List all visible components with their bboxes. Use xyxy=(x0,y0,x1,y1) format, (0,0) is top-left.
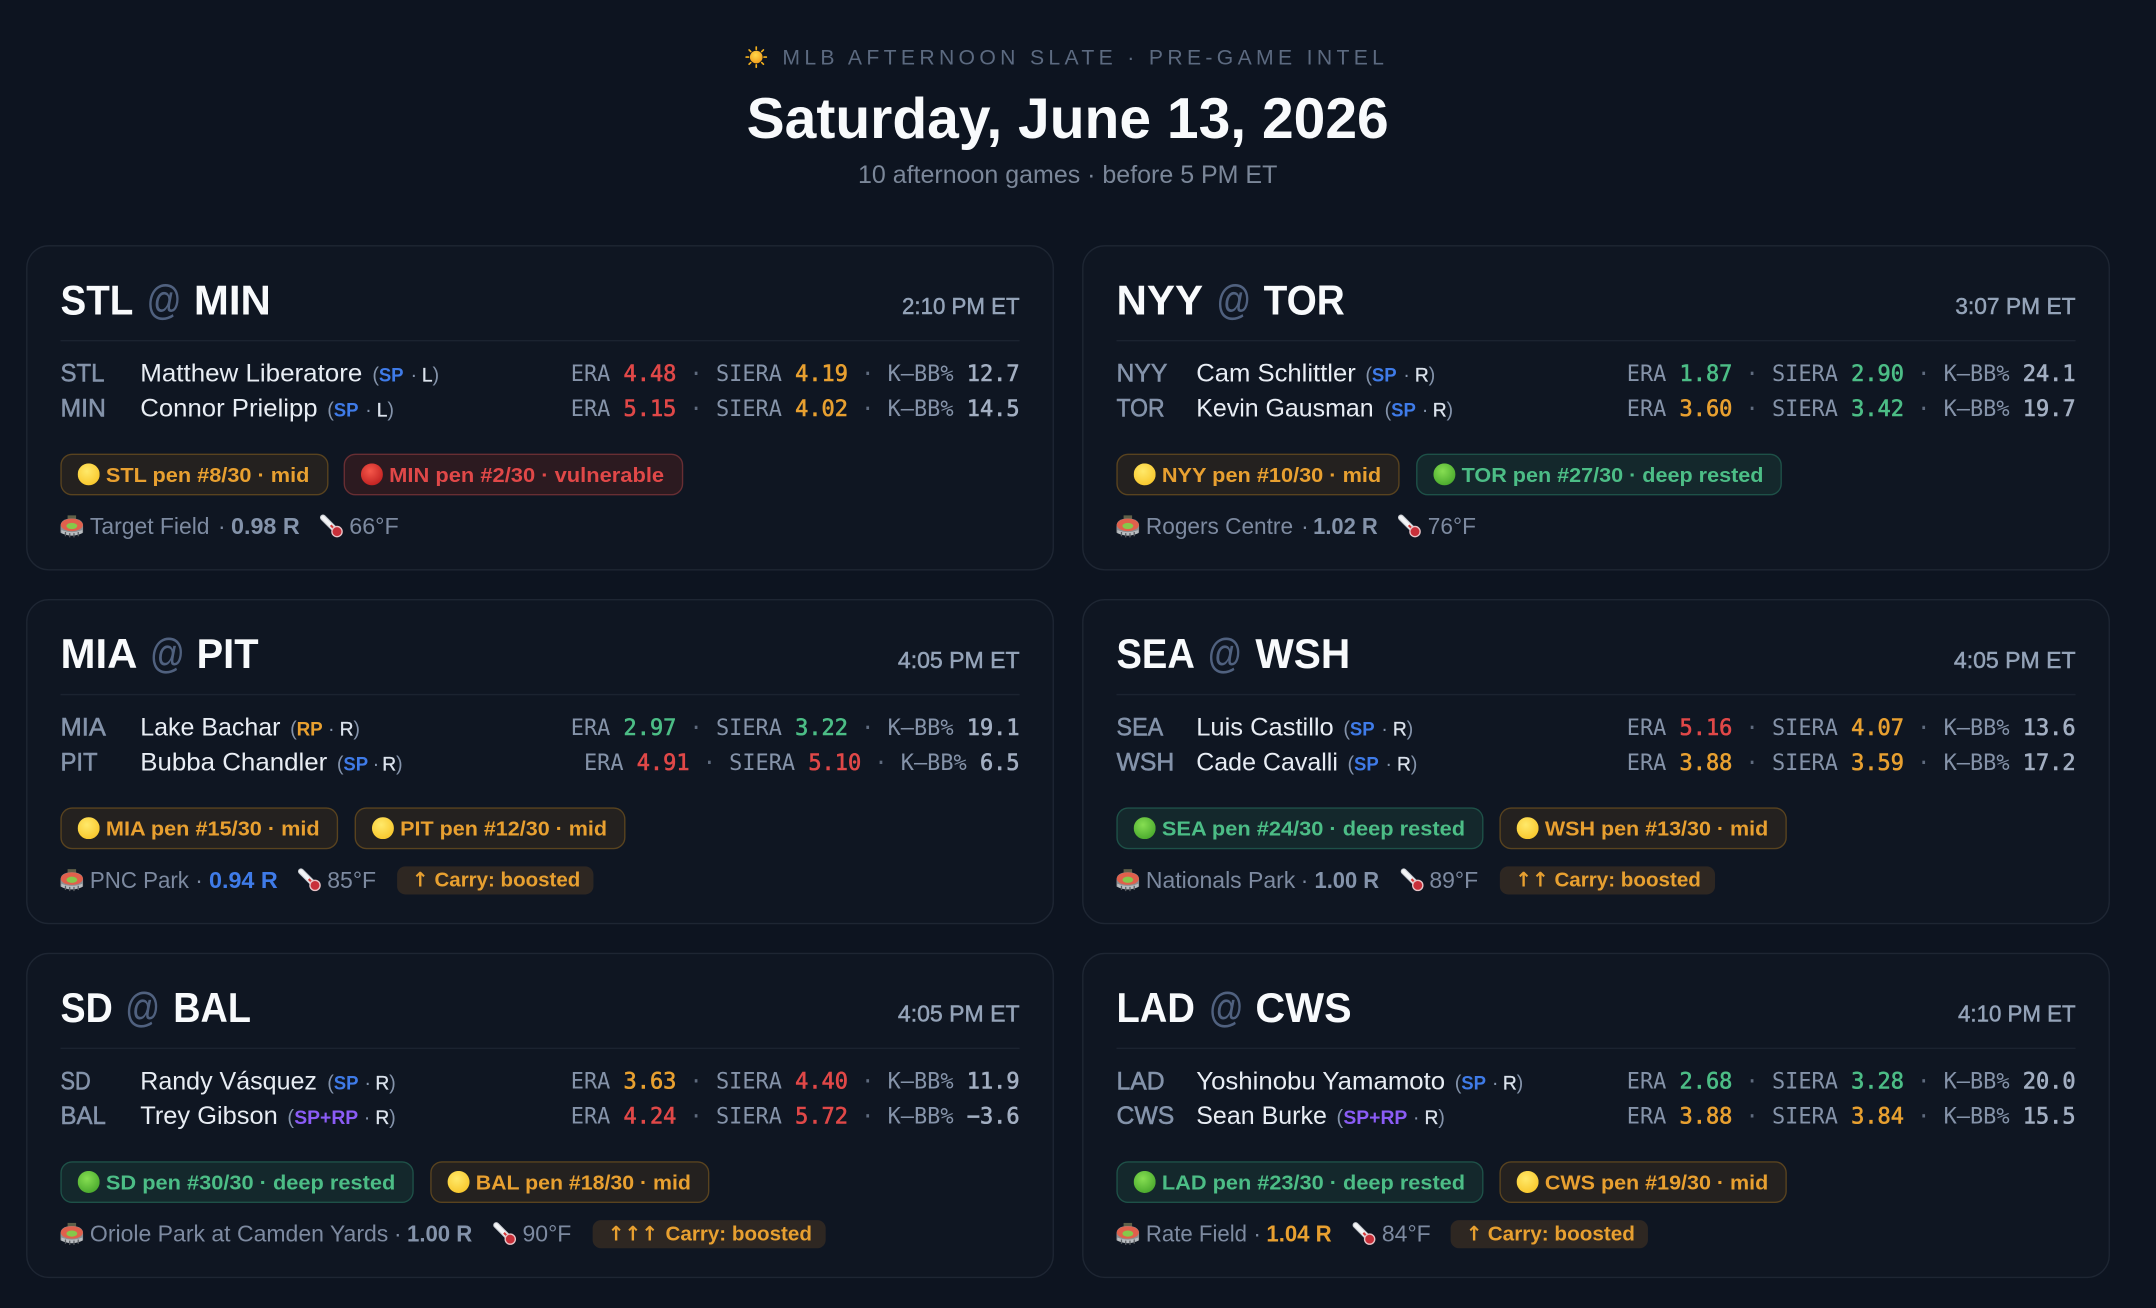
pitcher row: TOR: SP xyxy=(1391,400,1416,422)
bullpen pill: MIN xyxy=(344,454,683,495)
pitcher row: LAD: R xyxy=(1503,1073,1517,1094)
pitcher row: STL: SP xyxy=(379,365,404,387)
pitcher row: SD: SP xyxy=(334,1072,358,1094)
bullpen pill: BAL xyxy=(431,1162,709,1202)
venue line: 0.94 R xyxy=(209,867,278,893)
matchup heading: LAD xyxy=(1116,985,1195,1031)
pitcher row: BAL: · xyxy=(364,1107,370,1129)
game time: 4:05 PM ET xyxy=(898,647,1020,673)
venue line: · xyxy=(1301,513,1309,539)
pitcher row: STL: STL xyxy=(60,361,104,388)
pitcher row: TOR: ) xyxy=(1446,400,1453,422)
pitcher row: TOR: R xyxy=(1433,401,1447,422)
pitcher row: SEA: ) xyxy=(1407,718,1413,740)
pitcher row: STL: ) xyxy=(432,365,439,387)
pitcher row: MIA: R xyxy=(340,719,354,740)
matchup heading: @ xyxy=(150,631,185,677)
pitcher row: PIT: R xyxy=(382,754,396,775)
stats: LAD: ERA 2.68 · SIERA 3.28 · K–BB% 20.0 xyxy=(1627,1070,2076,1095)
pitcher row: MIA: Lake Bachar xyxy=(140,714,280,741)
pitcher row: NYY: ) xyxy=(1429,365,1435,387)
pitcher row: SEA: ( xyxy=(1343,718,1350,740)
panel: NYY at TOR xyxy=(1083,246,2109,570)
pitcher row: PIT: SP xyxy=(343,753,368,775)
bullpen pill: TOR xyxy=(1417,454,1781,495)
pitcher row: LAD: ( xyxy=(1455,1072,1462,1094)
pitcher row: MIN xyxy=(60,396,394,423)
stats: PIT: ERA 4.91 · SIERA 5.10 · K–BB% 6.5 xyxy=(584,751,1020,776)
pitcher row: LAD: ) xyxy=(1517,1072,1523,1094)
pitcher row: BAL xyxy=(60,1103,396,1130)
pitcher row: WSH: SP xyxy=(1354,753,1379,775)
pitcher row: CWS: Sean Burke xyxy=(1196,1103,1327,1130)
bullpen pill: PIT xyxy=(355,808,625,849)
stats: SD: ERA 3.63 · SIERA 4.40 · K–BB% 11.9 xyxy=(571,1070,1020,1095)
matchup heading: @ xyxy=(125,985,160,1031)
pitcher row: LAD: LAD xyxy=(1116,1068,1165,1095)
bullpen pill: MIN: MIN pen #2/30 · vulnerable xyxy=(389,464,664,487)
panel: SD at BAL xyxy=(27,953,1053,1277)
pitcher row: TOR xyxy=(1116,396,1453,423)
bullpen pill: MIA xyxy=(61,808,337,849)
pitcher row: SD: ) xyxy=(389,1072,396,1094)
matchup heading: SD xyxy=(60,985,113,1031)
game time: 4:05 PM ET xyxy=(1954,647,2076,673)
icon: sun xyxy=(746,47,766,67)
venue line: Target Field xyxy=(90,513,210,539)
pitcher row: LAD: · xyxy=(1492,1072,1499,1094)
venue line: Rate Field xyxy=(1146,1221,1247,1247)
venue line xyxy=(60,1220,826,1248)
pitcher row: CWS: CWS xyxy=(1116,1103,1174,1130)
matchup heading: MIN xyxy=(194,277,271,323)
venue line: 85°F xyxy=(327,867,376,893)
venue line: 0.98 R xyxy=(231,513,300,539)
carry badge: Carry: boosted xyxy=(1554,869,1701,892)
bullpen pill: WSH xyxy=(1500,808,1786,849)
matchup heading: NYY xyxy=(1116,277,1203,323)
panel: SEA at WSH xyxy=(1083,600,2109,924)
kicker line: MLB AFTERNOON SLATE · PRE-GAME INTEL xyxy=(782,47,1384,70)
pitcher row: WSH: · xyxy=(1385,753,1392,775)
stats: BAL: ERA 4.24 · SIERA 5.72 · K–BB% −3.6 xyxy=(571,1105,1020,1130)
matchup heading xyxy=(1116,985,1352,1031)
venue line: · xyxy=(1301,867,1308,893)
matchup heading: @ xyxy=(1207,631,1242,677)
pitcher row: SEA xyxy=(1116,714,1413,741)
matchup heading xyxy=(1116,631,1350,677)
bullpen pill: WSH: WSH pen #13/30 · mid xyxy=(1545,818,1768,841)
pitcher row: SD: R xyxy=(375,1073,389,1094)
pitcher row: BAL: R xyxy=(375,1108,389,1129)
bullpen pill: CWS xyxy=(1500,1162,1786,1202)
game time: 2:10 PM ET xyxy=(902,293,1020,319)
pitcher row: WSH: WSH xyxy=(1116,749,1174,776)
matchup heading: PIT xyxy=(197,631,258,677)
carry badge: ↑ xyxy=(1466,1222,1483,1246)
pitcher row: NYY: NYY xyxy=(1116,361,1167,388)
pitcher row: BAL: ( xyxy=(287,1107,294,1129)
panel: STL at MIN xyxy=(27,246,1053,570)
bullpen pill: BAL: BAL pen #18/30 · mid xyxy=(476,1172,691,1195)
pitcher row: CWS xyxy=(1116,1103,1445,1130)
carry badge xyxy=(397,866,593,894)
matchup heading: WSH xyxy=(1255,631,1350,677)
stats: WSH: ERA 3.88 · SIERA 3.59 · K–BB% 17.2 xyxy=(1627,751,2076,776)
pitcher row: MIN: L xyxy=(377,401,388,422)
pitcher row: SD: · xyxy=(364,1072,371,1094)
pitcher row: MIA: RP xyxy=(297,718,323,740)
pitcher row: SD: Randy Vásquez xyxy=(140,1068,317,1095)
matchup heading: @ xyxy=(146,277,182,323)
pitcher row: SD: ( xyxy=(327,1072,334,1094)
pitcher row: MIN: SP xyxy=(334,400,358,422)
bullpen pill: MIA: MIA pen #15/30 · mid xyxy=(106,818,320,841)
venue line xyxy=(1116,866,1715,894)
matchup heading: SEA xyxy=(1116,631,1195,677)
pitcher row: PIT: ( xyxy=(337,753,344,775)
bullpen pill: CWS: CWS pen #19/30 · mid xyxy=(1545,1172,1768,1195)
title: Saturday, June 13, 2026 xyxy=(747,87,1389,151)
pitcher row: MIA: ( xyxy=(290,718,297,740)
bullpen pill: LAD xyxy=(1117,1162,1483,1202)
venue line: · xyxy=(1253,1221,1261,1247)
bullpen pill: NYY xyxy=(1117,454,1399,495)
pitcher row: SEA: SP xyxy=(1350,718,1375,740)
carry badge: Carry: boosted xyxy=(434,869,580,892)
pitcher row: NYY: · xyxy=(1403,365,1410,387)
venue line: Rogers Centre xyxy=(1146,513,1293,539)
pitcher row: MIA: · xyxy=(328,718,335,740)
carry badge: Carry: boosted xyxy=(666,1223,812,1246)
carry badge xyxy=(1500,866,1715,894)
pitcher row: CWS: SP+RP xyxy=(1343,1107,1407,1129)
venue line xyxy=(1116,513,1476,539)
carry badge: Carry: boosted xyxy=(1488,1223,1635,1246)
carry badge: ↑↑↑ xyxy=(608,1222,658,1246)
bullpen pill: NYY: NYY pen #10/30 · mid xyxy=(1162,464,1381,487)
pitcher row: NYY: Cam Schlittler xyxy=(1196,361,1356,388)
stats: TOR: ERA 3.60 · SIERA 3.42 · K–BB% 19.7 xyxy=(1627,397,2076,422)
pitcher row: WSH: Cade Cavalli xyxy=(1196,749,1338,776)
pitcher row: STL: L xyxy=(422,366,433,387)
pitcher row: MIA: ) xyxy=(353,718,360,740)
game time: 3:07 PM ET xyxy=(1955,293,2076,319)
matchup heading: @ xyxy=(1209,985,1244,1031)
pitcher row: WSH xyxy=(1116,749,1417,776)
bullpen pill: SEA xyxy=(1117,808,1483,849)
carry badge xyxy=(593,1220,826,1248)
bullpen pill: PIT: PIT pen #12/30 · mid xyxy=(400,818,607,841)
matchup heading: STL xyxy=(60,277,133,323)
matchup heading: TOR xyxy=(1264,277,1345,323)
venue line: 1.00 R xyxy=(407,1221,472,1247)
venue line: 1.00 R xyxy=(1314,867,1379,893)
pitcher row: MIN: Connor Prielipp xyxy=(140,396,318,423)
pitcher row: PIT: Bubba Chandler xyxy=(140,749,327,776)
pitcher row: SEA: · xyxy=(1381,718,1388,740)
pitcher row: NYY xyxy=(1116,361,1435,388)
pitcher row: SD: SD xyxy=(60,1068,91,1095)
venue line: · xyxy=(394,1221,402,1247)
pitcher row: STL: · xyxy=(410,365,417,387)
matchup heading xyxy=(1116,277,1345,323)
pitcher row: STL: ( xyxy=(372,365,379,387)
stats: MIN: ERA 5.15 · SIERA 4.02 · K–BB% 14.5 xyxy=(571,397,1020,422)
pitcher row: MIN: ) xyxy=(387,400,394,422)
venue line: 84°F xyxy=(1382,1221,1431,1247)
venue line: 90°F xyxy=(522,1221,571,1247)
bullpen pill: TOR: TOR pen #27/30 · deep rested xyxy=(1462,464,1763,487)
pitcher row: NYY: R xyxy=(1415,366,1429,387)
pitcher row: BAL: SP+RP xyxy=(294,1107,358,1129)
pitcher row: PIT: ) xyxy=(396,753,403,775)
matchup heading xyxy=(60,985,251,1031)
pitcher row: MIN: · xyxy=(365,400,372,422)
stats: SEA: ERA 5.16 · SIERA 4.07 · K–BB% 13.6 xyxy=(1627,716,2076,741)
pitcher row: BAL: ) xyxy=(389,1107,396,1129)
venue line: · xyxy=(218,513,226,539)
pitcher row: CWS: R xyxy=(1424,1108,1438,1129)
venue line: 66°F xyxy=(349,513,399,539)
carry badge: ↑↑ xyxy=(1515,868,1549,892)
venue line: 89°F xyxy=(1429,867,1478,893)
game time: 4:05 PM ET xyxy=(898,1001,1020,1027)
panel: LAD at CWS xyxy=(1083,953,2109,1277)
bullpen pill: STL xyxy=(61,454,328,495)
subtitle: 10 afternoon games · before 5 PM ET xyxy=(858,162,1277,189)
venue line: 1.02 R xyxy=(1313,513,1378,539)
pitcher row: SEA: R xyxy=(1393,719,1407,740)
matchup heading: CWS xyxy=(1255,985,1352,1031)
pitcher row: SD xyxy=(60,1068,396,1095)
pitcher row: WSH: R xyxy=(1397,754,1411,775)
pitcher row: CWS: · xyxy=(1413,1107,1419,1129)
panel: MIA at PIT xyxy=(27,600,1053,924)
venue line: PNC Park xyxy=(90,867,190,893)
pitcher row: PIT: · xyxy=(373,753,379,775)
venue line xyxy=(1116,1220,1648,1248)
pitcher row: STL: Matthew Liberatore xyxy=(140,361,362,388)
venue line: 76°F xyxy=(1428,513,1476,539)
pitcher row: MIN: MIN xyxy=(60,396,106,423)
carry badge xyxy=(1451,1220,1648,1248)
matchup heading xyxy=(60,631,258,677)
pitcher row: BAL: Trey Gibson xyxy=(140,1103,278,1130)
pitcher row: TOR: ( xyxy=(1385,400,1392,422)
bullpen pill: SD: SD pen #30/30 · deep rested xyxy=(106,1172,395,1195)
pitcher row: WSH: ) xyxy=(1411,753,1417,775)
venue line: Oriole Park at Camden Yards xyxy=(90,1221,388,1247)
bullpen pill: LAD: LAD pen #23/30 · deep rested xyxy=(1162,1172,1465,1195)
venue line: Nationals Park xyxy=(1146,867,1296,893)
pitcher row: TOR: Kevin Gausman xyxy=(1196,396,1374,423)
pitcher row: MIN: ( xyxy=(327,400,334,422)
pitcher row: NYY: SP xyxy=(1372,365,1397,387)
stats: NYY: ERA 1.87 · SIERA 2.90 · K–BB% 24.1 xyxy=(1627,362,2076,387)
matchup heading: BAL xyxy=(173,985,251,1031)
pitcher row: NYY: ( xyxy=(1365,365,1372,387)
pitcher row: SEA: Luis Castillo xyxy=(1196,714,1334,741)
venue line xyxy=(60,866,593,894)
pitcher row: CWS: ( xyxy=(1336,1107,1343,1129)
pitcher row: PIT xyxy=(60,749,403,776)
pitcher row: WSH: ( xyxy=(1348,753,1354,775)
bullpen pill: STL: STL pen #8/30 · mid xyxy=(106,464,309,487)
stats: CWS: ERA 3.88 · SIERA 3.84 · K–BB% 15.5 xyxy=(1627,1105,2076,1130)
stats: MIA: ERA 2.97 · SIERA 3.22 · K–BB% 19.1 xyxy=(571,716,1020,741)
pitcher row: CWS: ) xyxy=(1438,1107,1445,1129)
bullpen pill: SEA: SEA pen #24/30 · deep rested xyxy=(1162,818,1465,841)
pitcher row: BAL: BAL xyxy=(60,1103,106,1130)
venue line: 1.04 R xyxy=(1266,1221,1332,1247)
pitcher row: LAD: SP xyxy=(1461,1072,1486,1094)
matchup heading: MIA xyxy=(60,631,138,677)
carry badge: ↑ xyxy=(412,868,429,892)
header xyxy=(746,47,1389,189)
game time: 4:10 PM ET xyxy=(1958,1001,2076,1027)
pitcher row: STL xyxy=(60,361,439,388)
matchup heading: @ xyxy=(1216,277,1251,323)
pitcher row: PIT: PIT xyxy=(60,749,98,776)
pitcher row: LAD: Yoshinobu Yamamoto xyxy=(1196,1068,1445,1095)
venue line xyxy=(60,513,399,539)
matchup heading xyxy=(60,277,271,323)
pitcher row: LAD xyxy=(1116,1068,1523,1095)
pitcher row: TOR: TOR xyxy=(1116,396,1165,423)
pitcher row: TOR: · xyxy=(1422,400,1428,422)
bullpen pill: SD xyxy=(61,1162,413,1202)
pitcher row: SEA: SEA xyxy=(1116,714,1164,741)
pitcher row: MIA: MIA xyxy=(60,714,106,741)
pitcher row: MIA xyxy=(60,714,360,741)
venue line: · xyxy=(195,867,203,893)
stats: STL: ERA 4.48 · SIERA 4.19 · K–BB% 12.7 xyxy=(571,362,1020,387)
